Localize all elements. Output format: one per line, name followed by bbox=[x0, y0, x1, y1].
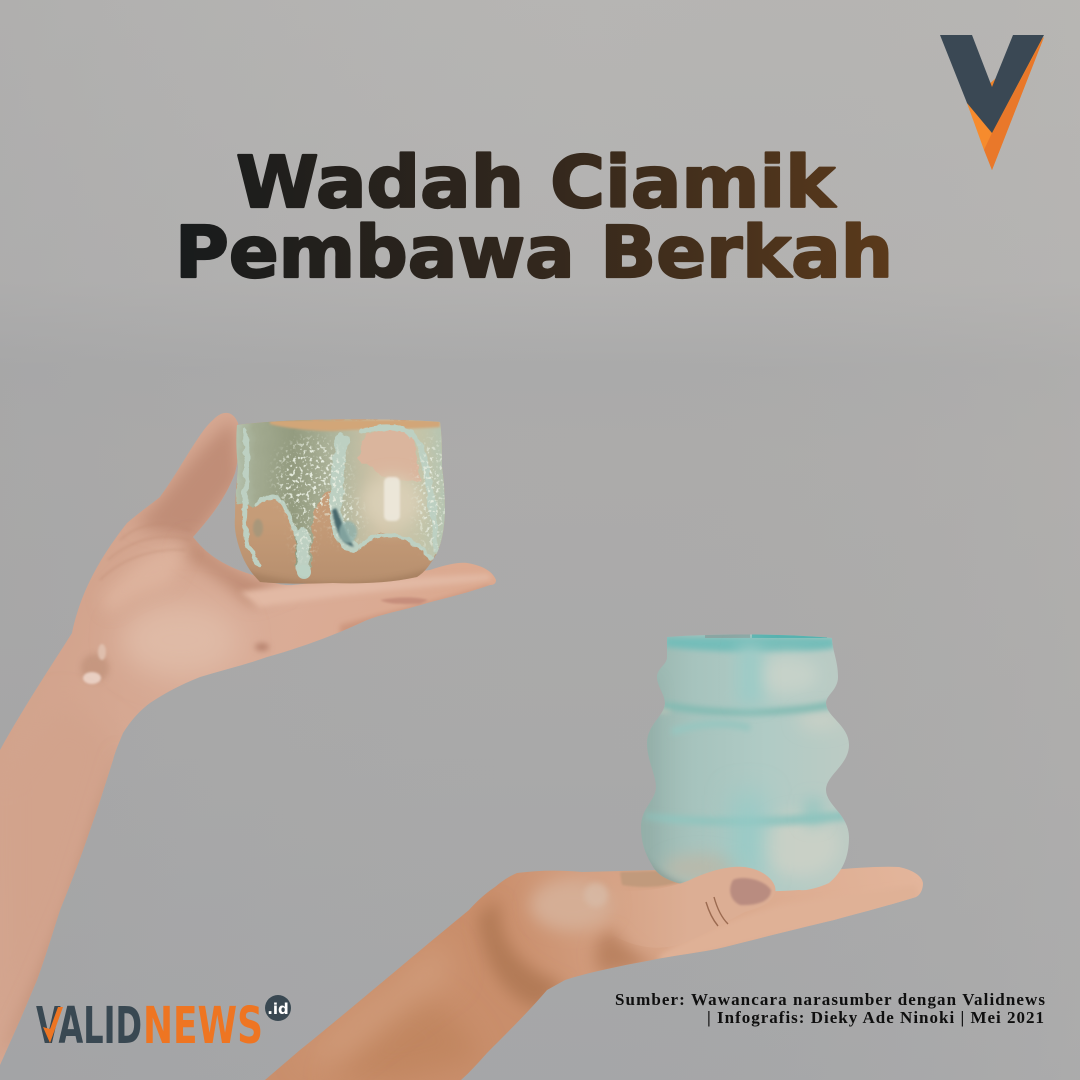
drip end bbox=[297, 569, 311, 579]
rim glaze bbox=[665, 637, 835, 652]
pale patches bbox=[751, 655, 819, 695]
small glazed cup bbox=[232, 419, 448, 592]
pale glossy zone bbox=[362, 476, 422, 528]
source credit: | Infografis: Dieky Ade Ninoki | Mei 2021 bbox=[707, 1008, 1044, 1027]
lower hand holding vase bbox=[265, 867, 923, 1080]
upper hand holding cup bbox=[0, 413, 496, 1065]
icon: Validnews V logo bbox=[940, 35, 1044, 170]
base shadow bbox=[652, 864, 684, 884]
title: Wadah Ciamik bbox=[236, 141, 837, 224]
glaze body with drips bbox=[232, 420, 448, 572]
logo: Validnews.id: .id bbox=[267, 1000, 289, 1018]
thumb over vase bbox=[612, 867, 776, 948]
turquoise ceramic vase bbox=[636, 634, 850, 900]
bottom shadow bbox=[252, 570, 425, 584]
dark glaze pool bbox=[332, 508, 354, 547]
highlight bbox=[384, 477, 400, 521]
source credit bbox=[615, 990, 1045, 1027]
title bbox=[175, 141, 893, 294]
speckled glaze bbox=[276, 440, 446, 560]
rim bbox=[270, 420, 440, 431]
hand shape bbox=[265, 867, 923, 1080]
logo: Validnews.id: VALID bbox=[36, 997, 142, 1056]
logo: Validnews.id: NEWS bbox=[143, 997, 263, 1056]
title: Pembawa Berkah bbox=[175, 211, 893, 294]
source credit: Sumber: Wawancara narasumber dengan Validnews bbox=[615, 990, 1045, 1009]
logo: Validnews.id bbox=[36, 995, 291, 1056]
hand shading bbox=[300, 870, 920, 1080]
teal bands bbox=[660, 700, 835, 716]
hand shape bbox=[0, 413, 496, 1065]
pale drip outlines bbox=[244, 427, 436, 570]
peach patch bbox=[358, 430, 421, 481]
hand shading bbox=[0, 420, 490, 1060]
